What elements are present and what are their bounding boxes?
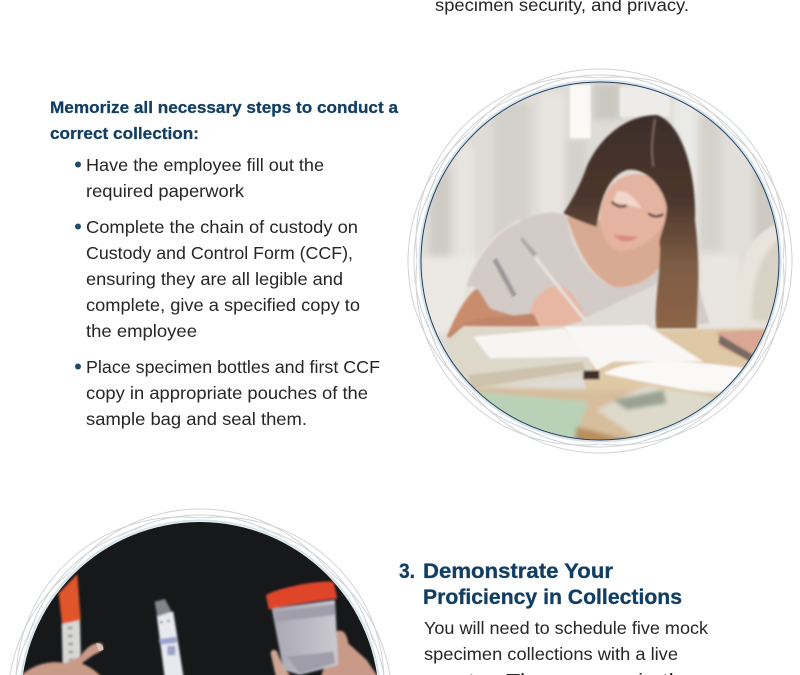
bullet: chain of custody: ensuring they are all legible and: [86, 269, 343, 289]
step description: specimen collections with a live: [424, 644, 678, 664]
step heading: Proficiency in Collections: [423, 586, 682, 609]
bullet: fill out paperwork: [75, 155, 324, 201]
bullet: fill out paperwork: Have the employee fill out the: [86, 155, 324, 175]
pencil in hand: [495, 237, 587, 322]
left hand: [20, 643, 103, 675]
photo border: [421, 82, 779, 440]
subheading: memorize steps: Memorize all necessary steps to conduct a: [50, 98, 399, 117]
section: memorize steps text: [50, 98, 399, 429]
step heading: Demonstrate Your: [423, 560, 613, 583]
step description: [424, 618, 708, 675]
photo: student studying in circular frame: [400, 60, 800, 460]
step number: 3.: [399, 560, 415, 583]
subheading: memorize steps: correct collection:: [50, 124, 199, 143]
lancet pen: [155, 599, 184, 675]
bullet: fill out paperwork: required paperwork: [86, 181, 244, 201]
step heading: [423, 560, 682, 609]
sample tube: [59, 574, 83, 675]
bullet: seal specimen bottles: [75, 357, 380, 429]
bullet: chain of custody: [75, 217, 360, 341]
bullet: chain of custody: Complete the chain of custody on: [86, 217, 358, 237]
bullet: chain of custody: the employee: [86, 321, 197, 341]
specimen cup: [266, 581, 338, 675]
section: step 3 text: [399, 560, 708, 675]
right hand: [320, 631, 380, 675]
bullet: seal specimen bottles: copy in appropriate pouches of the: [86, 383, 368, 403]
bullet: seal specimen bottles: Place specimen bottles and first CCF: [86, 357, 380, 377]
step description: You will need to schedule five mock: [424, 618, 708, 638]
bullet: chain of custody: complete, give a specified copy to: [86, 295, 360, 315]
bullet: seal specimen bottles: sample bag and seal them.: [86, 409, 307, 429]
photo: specimen collection tools in circular frame: [0, 500, 400, 675]
bullet: chain of custody: Custody and Control Form (CCF),: [86, 243, 353, 263]
subheading: memorize steps: [50, 98, 399, 143]
